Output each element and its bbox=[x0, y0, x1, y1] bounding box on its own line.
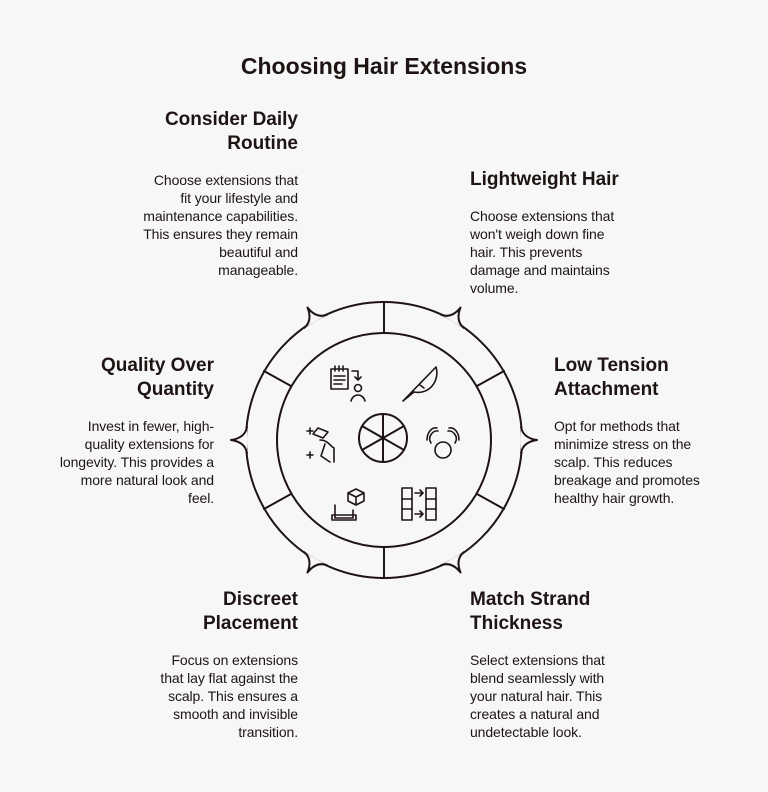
text: lightweight hair: Choose extensions that won't weigh down fine hair. This prevents damage and maintains volume. bbox=[470, 208, 614, 296]
heading: discreet placement: Discreet bbox=[223, 589, 298, 610]
icon: columns with arrows bbox=[402, 488, 436, 520]
center wheel icon bbox=[359, 414, 407, 462]
text: match strand thickness: Select extensions that blend seamlessly with your natural hair. This creates a natural and undetectable look. bbox=[470, 652, 605, 740]
heading: match strand thickness: Thickness bbox=[470, 613, 563, 634]
icon: hand with gem bbox=[307, 428, 334, 462]
heading: low tension attachment bbox=[554, 355, 669, 400]
outer ring with pointers bbox=[231, 301, 537, 579]
heading: discreet placement bbox=[203, 589, 298, 634]
icon: notepad and person bbox=[331, 366, 365, 401]
heading: quality over quantity: Quantity bbox=[137, 379, 214, 400]
text: discreet placement: Focus on extensions that lay flat against the scalp. This ensures a smooth and invisible transition. bbox=[160, 652, 298, 740]
heading: low tension attachment: Low Tension bbox=[554, 355, 669, 376]
heading: consider daily routine: Routine bbox=[227, 133, 298, 154]
heading: discreet placement: Placement bbox=[203, 613, 298, 634]
heading: quality over quantity bbox=[101, 355, 214, 400]
icon: laptop with box bbox=[332, 489, 364, 520]
text: consider daily routine: Choose extensions that fit your lifestyle and maintenance capabilities. This ensures they remain beautiful and manageable. bbox=[143, 172, 298, 278]
text: quality over quantity: Invest in fewer, high-quality extensions for longevity. This provides a more natural look and feel. bbox=[60, 418, 214, 506]
heading: match strand thickness bbox=[470, 589, 590, 634]
heading: quality over quantity: Quality Over bbox=[101, 355, 214, 376]
text: low tension attachment: Opt for methods that minimize stress on the scalp. This reduces breakage and promotes healthy hair growth. bbox=[554, 418, 700, 506]
heading: low tension attachment: Attachment bbox=[554, 379, 659, 400]
icon: feather bbox=[403, 367, 437, 401]
title: Choosing Hair Extensions bbox=[241, 53, 527, 79]
heading: match strand thickness: Match Strand bbox=[470, 589, 590, 610]
icon: hands over head bbox=[427, 428, 459, 458]
heading: consider daily routine bbox=[165, 109, 298, 154]
heading: consider daily routine: Consider Daily bbox=[165, 109, 298, 130]
heading: lightweight hair: Lightweight Hair bbox=[470, 169, 619, 190]
